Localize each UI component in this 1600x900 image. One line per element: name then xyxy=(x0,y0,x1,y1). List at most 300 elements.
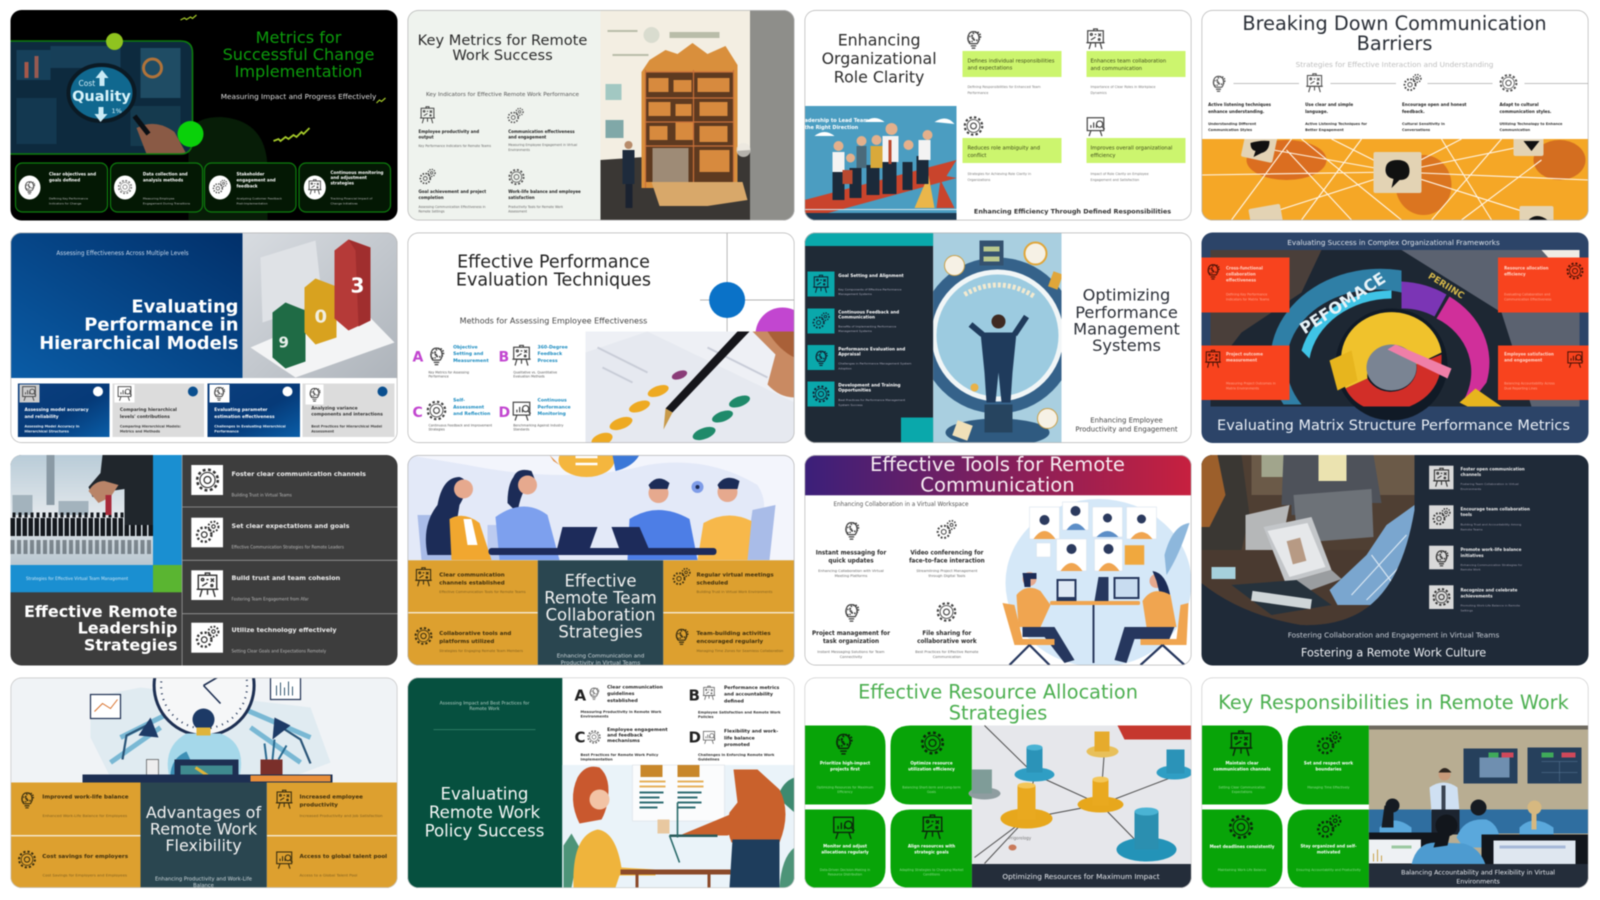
subtitle: Enhancing Collaboration in a Virtual Workspace xyxy=(833,502,969,508)
technique A: Objective xyxy=(453,344,478,350)
center panel xyxy=(140,782,267,888)
subtitle: Remote Work xyxy=(469,706,500,712)
item 1: and expectations xyxy=(968,66,1013,72)
grey strip xyxy=(750,10,794,220)
title: Evaluation Techniques xyxy=(456,270,651,290)
squiggle accents xyxy=(180,15,386,141)
panel background xyxy=(408,455,794,666)
panel: Breaking Down Communication Barriers xyxy=(1202,10,1588,231)
panel: Effective Remote Leadership Strategies xyxy=(10,455,398,666)
card border xyxy=(408,232,794,443)
technique C xyxy=(412,398,493,432)
block 1: Prioritize high-impact xyxy=(820,760,870,766)
item B: defined xyxy=(724,698,744,704)
metric 3: Goal achievement and project xyxy=(418,189,486,194)
title: Advantages of xyxy=(146,803,261,822)
item 1: channels xyxy=(1460,472,1482,477)
row 2: Set clear expectations and goals xyxy=(232,522,350,530)
advantage 1 xyxy=(22,793,129,818)
block 3 xyxy=(804,810,886,888)
tool 2: face-to-face interaction xyxy=(909,558,985,564)
title: Effective Performance xyxy=(457,252,650,272)
card 4: components and interactions xyxy=(311,412,383,418)
step card 1: Clear objectives and xyxy=(49,172,96,176)
item 1 xyxy=(1429,466,1525,491)
technique B: Feedback xyxy=(538,351,563,357)
title: Organizational xyxy=(822,49,937,68)
item 4: Opportunities xyxy=(838,388,871,392)
item A: guidelines xyxy=(607,691,635,697)
item D: Challenges in Enforcing Remote Work xyxy=(698,753,775,757)
item B: Policies xyxy=(698,715,714,719)
title: Remote Team xyxy=(544,588,657,608)
step 1 xyxy=(1208,76,1272,132)
block 1 xyxy=(1202,726,1282,804)
step 3: Encourage open and honest xyxy=(1402,102,1467,107)
item D xyxy=(688,728,778,762)
tool 1: quick updates xyxy=(828,558,874,564)
item 3: scheduled xyxy=(696,580,728,586)
item D: promoted xyxy=(724,742,750,748)
step card 4: and adjustment xyxy=(330,175,367,180)
item C: and feedback xyxy=(607,732,644,738)
title: Key Metrics for Remote xyxy=(418,32,587,49)
card 2: Comparing Hierarchical Models: xyxy=(120,424,181,428)
title: Work Success xyxy=(452,47,553,64)
step 3 xyxy=(1402,75,1467,132)
step 4: Adapt to cultural xyxy=(1500,102,1539,107)
title: Management xyxy=(1073,320,1180,338)
advantage 3 xyxy=(276,790,383,818)
tool 3: Project management for xyxy=(812,631,890,637)
technique A: Setting and xyxy=(453,351,483,357)
technique B: B xyxy=(498,350,509,366)
item 1: Defining Responsibilities for Enhanced Team xyxy=(968,85,1041,89)
item 4: System Success xyxy=(838,403,863,407)
block 3: Maintaining Work-Life Balance xyxy=(1218,868,1266,872)
item 4 xyxy=(1429,585,1520,612)
tool 4: Communication xyxy=(933,655,961,659)
item 3 xyxy=(1429,546,1523,572)
advantage 3: Increased Productivity and Job Satisfaction xyxy=(300,813,383,818)
item 3: Organizations xyxy=(968,178,991,182)
subtitle: Enhancing Communication and xyxy=(557,654,645,660)
panel background xyxy=(804,678,1192,888)
subtitle: Assessing Impact and Best Practices for xyxy=(440,700,530,706)
item 2: platforms utilized xyxy=(439,639,494,645)
tool 4 xyxy=(915,603,979,659)
panel background xyxy=(1202,455,1588,666)
box: bottom-left: measurement xyxy=(1226,358,1257,362)
technique A: Performance xyxy=(428,374,449,378)
block 2: Optimize resource xyxy=(910,760,953,766)
item 2 xyxy=(808,308,899,334)
tool 3 xyxy=(812,605,890,659)
technique B: Qualitative vs. Quantitative xyxy=(513,370,557,374)
image: man in dial xyxy=(920,232,1076,446)
metric 1: Key Performance Indicators for Remote Teams xyxy=(418,144,491,148)
step 2: Better Engagement xyxy=(1305,128,1344,132)
item 3: conflict xyxy=(968,153,986,159)
box: bottom-right: and engagement xyxy=(1504,358,1542,362)
panel: Evaluating Matrix Structure Performance Metrics xyxy=(1202,232,1588,443)
row 2 xyxy=(191,518,350,550)
title: Evaluating xyxy=(131,296,238,318)
step card 1 xyxy=(16,163,108,212)
advantage 4: Access to global talent pool xyxy=(300,854,387,860)
panel: Enhancing Organizational Role Clarity xyxy=(804,10,1192,220)
item 1: Key Components of Effective Performance xyxy=(838,288,902,292)
advantage 1: Enhanced Work-Life Balance for Employees xyxy=(42,813,127,818)
subtitle: Enhancing Productivity and Work-Life xyxy=(155,876,252,882)
step card 3: Stakeholder xyxy=(236,172,264,176)
box: bottom-right: Dual Reporting Lines xyxy=(1504,386,1538,390)
card border xyxy=(10,678,398,888)
item 4: Impact of Role Clarity on Employee xyxy=(1090,172,1149,176)
panel: Key Metrics for Remote Work Success xyxy=(408,10,794,220)
item 3: Regular virtual meetings xyxy=(696,572,774,578)
block 3: Monitor and adjust xyxy=(823,844,867,848)
card 3: estimation effectiveness xyxy=(214,414,275,420)
advantage 4 xyxy=(277,852,387,878)
item A: A xyxy=(574,686,586,704)
title: Effective Tools for Remote xyxy=(870,453,1125,476)
step card 1: goals defined xyxy=(49,178,80,182)
block 1 xyxy=(804,726,886,804)
subtitle: Measuring Impact and Progress Effectively xyxy=(221,92,377,101)
card 4: Assessment xyxy=(311,430,334,434)
title: Strategies xyxy=(558,622,643,642)
item 3 xyxy=(808,345,911,370)
step 1: Active listening techniques xyxy=(1208,102,1272,107)
panel: Optimizing Performance Management Systems xyxy=(804,232,1192,446)
card 2 xyxy=(112,384,204,437)
block 1: Setting Clear Communication xyxy=(1219,786,1265,790)
dark column xyxy=(804,232,933,443)
step 2: Use clear and simple xyxy=(1305,102,1353,107)
tool 3: Instant Messaging Solutions for Team xyxy=(817,650,885,654)
title: Strategies xyxy=(84,636,178,654)
illustration: video call xyxy=(1002,499,1192,667)
panel background xyxy=(408,232,794,443)
tool 2 xyxy=(909,521,985,578)
panel background xyxy=(1202,678,1588,888)
title: Evaluating xyxy=(441,784,528,804)
item C: mechanisms xyxy=(607,738,640,744)
footer bar xyxy=(1369,864,1588,888)
box: top-left: Defining Key Performance xyxy=(1226,292,1267,296)
panel: Effective Resource Allocation Strategies xyxy=(804,678,1192,888)
box: bottom-right xyxy=(1498,346,1588,400)
item 2: Encourage team collaboration xyxy=(1460,506,1530,512)
item 2: Importance of Clear Roles in Workplace xyxy=(1090,85,1155,89)
illustration: four colleagues xyxy=(408,443,794,560)
panel background xyxy=(408,11,600,220)
photo: magnifier over dashboard: 1% xyxy=(112,107,122,115)
block 4 xyxy=(1288,810,1369,888)
item 2 xyxy=(1429,505,1530,532)
item B xyxy=(688,685,781,719)
title: Remote Work xyxy=(429,803,541,822)
step card 3: Post-Implementation xyxy=(236,202,268,206)
photo: magnifier over dashboard: Quality xyxy=(72,89,131,105)
subtitle: Strategies for Effective Interaction and Understanding xyxy=(1296,60,1493,69)
box: top-right: Resource allocation xyxy=(1504,266,1549,270)
technique D: Performance xyxy=(538,404,571,410)
panel background xyxy=(408,678,794,888)
amber left column xyxy=(10,782,140,888)
block 4: Stay organized and self- xyxy=(1300,844,1357,848)
metric 1 xyxy=(418,107,491,148)
divider xyxy=(10,835,398,836)
advantage 4: Access to a Global Talent Pool xyxy=(300,872,357,878)
card 2: Comparing hierarchical xyxy=(120,407,177,413)
tool 1: Meeting Platforms xyxy=(835,574,867,578)
block 4: Conditions xyxy=(923,872,940,876)
item D: Guidelines xyxy=(698,758,719,762)
item 3: Promote work-life balance xyxy=(1460,547,1522,552)
item 2: and communication xyxy=(1090,66,1142,72)
rule xyxy=(434,728,536,731)
card 1: Assessing Model Accuracy in xyxy=(24,424,80,428)
title: Systems xyxy=(1092,336,1161,355)
item A: established xyxy=(607,698,638,704)
image: chess pawns city xyxy=(10,455,153,565)
item 1: Effective Communication Tools for Remote Teams xyxy=(439,590,526,594)
step 2: language. xyxy=(1305,109,1328,114)
band caption: Strategies for Effective Virtual Team Management xyxy=(26,576,128,581)
title: Enhancing xyxy=(838,30,921,50)
footer caption: Balancing Accountability and Flexibility in Virtual xyxy=(1401,870,1555,876)
technique B xyxy=(498,344,568,378)
item 4: Improves overall organizational xyxy=(1090,146,1172,152)
item 1: Foster open communication xyxy=(1460,466,1525,472)
row 1: Foster clear communication channels xyxy=(232,470,366,478)
step card 4: strategies xyxy=(330,180,355,186)
item 4: Settings xyxy=(1460,608,1473,612)
step card 2: Measuring Employee xyxy=(143,196,174,200)
subtitle: Productivity and Engagement xyxy=(1075,426,1178,434)
item 4: achievements xyxy=(1460,594,1493,598)
title: Optimizing xyxy=(1083,286,1170,304)
tool 1: Instant messaging for xyxy=(816,550,886,556)
step card 2: Engagement During Transitions xyxy=(143,202,191,206)
block 1: projects first xyxy=(830,766,860,772)
item 3 xyxy=(674,569,774,594)
item B: B xyxy=(688,686,700,704)
panel background xyxy=(1202,232,1588,443)
metric 3 xyxy=(418,169,486,214)
item 1: Management Systems xyxy=(838,292,872,296)
top caption: Evaluating Success in Complex Organizational Frameworks xyxy=(1287,238,1500,247)
item 4 xyxy=(1086,118,1186,182)
step 1: Understanding Different xyxy=(1208,122,1256,126)
step card 4: Continuous monitoring xyxy=(330,170,384,175)
step 4 xyxy=(1500,75,1563,132)
item 2: Management Systems xyxy=(838,329,872,333)
technique D xyxy=(498,398,571,432)
row 3 xyxy=(191,570,341,602)
step 3: feedback. xyxy=(1402,109,1425,114)
item B: Employee Satisfaction and Remote Work xyxy=(698,710,781,714)
item 4: Best Practices for Performance Management xyxy=(838,398,906,402)
item D: life balance xyxy=(724,736,755,742)
step 2 xyxy=(1305,74,1367,132)
panel: Key Responsibilities in Remote Work xyxy=(1202,678,1588,888)
panel background xyxy=(804,455,1192,666)
item 4: Recognize and celebrate xyxy=(1460,588,1518,592)
center panel xyxy=(538,560,663,666)
item 1 xyxy=(415,568,526,594)
title: Flexibility xyxy=(165,836,242,855)
box: top-left: collaboration xyxy=(1226,272,1256,276)
row 3: Build trust and team cohesion xyxy=(232,574,341,582)
title: Policy Success xyxy=(425,822,544,840)
item 2: Strategies for Engaging Remote Team Members xyxy=(439,649,523,653)
row 1: Building Trust in Virtual Teams xyxy=(232,492,292,498)
item 2: Benefits of Implementing Performance xyxy=(838,324,896,328)
technique B: Process xyxy=(538,358,558,364)
item B: and accountability xyxy=(724,692,773,698)
blue band xyxy=(10,565,153,592)
box: bottom-left: Project outcome xyxy=(1226,352,1263,356)
item D: D xyxy=(688,728,701,746)
illustration: worker at desk with clock xyxy=(82,636,332,782)
box: top-right: efficiency xyxy=(1504,272,1526,276)
lime circle xyxy=(106,33,123,50)
step connectors xyxy=(1234,82,1588,84)
decorative circles xyxy=(700,232,810,362)
row 1 xyxy=(191,465,366,498)
panel background xyxy=(10,10,398,220)
metric 3: completion xyxy=(418,195,444,200)
title: Metrics for xyxy=(256,28,342,47)
metric 2: Communication effectiveness xyxy=(508,129,575,134)
card 3: Evaluating parameter xyxy=(214,407,268,413)
technique C: Strategies xyxy=(428,428,445,432)
title: Breaking Down Communication xyxy=(1242,12,1547,35)
row 3: Fostering Team Engagement from Afar xyxy=(232,596,309,602)
card border xyxy=(10,232,398,443)
box: top-left: effectiveness xyxy=(1226,278,1257,282)
blue strip xyxy=(153,455,182,565)
title: Hierarchical Models xyxy=(39,333,238,354)
block 4: motivated xyxy=(1317,850,1340,854)
box: top-right: Communication Effectiveness xyxy=(1504,298,1552,302)
item A xyxy=(574,684,663,718)
card 4: Best Practices for Hierarchical Model xyxy=(311,424,382,428)
item 4 xyxy=(676,629,783,653)
tool 3: Connectivity xyxy=(840,655,863,659)
item 1 xyxy=(962,32,1062,95)
card border xyxy=(804,232,1192,443)
step 1: Communication Styles xyxy=(1208,128,1252,132)
box: top-right: Evaluating Collaboration and xyxy=(1504,292,1550,296)
item 2: tools xyxy=(1460,512,1472,517)
block 1: communication channels xyxy=(1213,766,1271,772)
divider xyxy=(408,612,794,613)
photo: magnifier over dashboard: Cost xyxy=(78,79,95,88)
advantage 2: Cost Savings for Employers and Employees xyxy=(42,872,127,878)
block 4: Adapting Strategies to Changing Market xyxy=(900,868,964,872)
step card 4 xyxy=(299,163,390,212)
block 2: Goals xyxy=(927,790,936,794)
panel: Metrics for Successful Change Implementation xyxy=(10,10,398,220)
image: 3D bars: 0 xyxy=(314,306,327,328)
footer caption: Optimizing Resources for Maximum Impact xyxy=(1002,872,1160,881)
tool 3: task organization xyxy=(823,639,879,645)
item C: C xyxy=(574,728,586,746)
metric 3: Assessing Communication Effectiveness in xyxy=(418,205,486,209)
subtitle: Assessing Effectiveness Across Multiple Levels xyxy=(56,251,189,257)
image: team on arrow: the Right Direction xyxy=(804,125,859,131)
item 2: Continuous Feedback and xyxy=(838,310,899,314)
item A: Measuring Productivity in Remote Work xyxy=(580,710,662,714)
item C: Implementation xyxy=(580,758,613,762)
card 1: and reliability xyxy=(24,414,59,420)
technique C: Self- xyxy=(453,398,465,404)
item 4: encouraged regularly xyxy=(696,639,764,645)
item 1: Defines individual responsibilities xyxy=(968,58,1055,64)
item 3: Challenges in Performance Management System xyxy=(838,362,911,366)
step 2: Active Listening Techniques for xyxy=(1305,122,1367,126)
block 3: allocations regularly xyxy=(821,850,869,854)
step 4: Communication xyxy=(1500,128,1531,132)
item 3: Building Trust in Virtual Work Environments xyxy=(696,590,773,594)
box: top-right xyxy=(1498,258,1588,312)
image: 3D bars xyxy=(242,232,398,378)
block 2: utilization efficiency xyxy=(908,766,955,772)
caption: Fostering Collaboration and Engagement in Virtual Teams xyxy=(1288,630,1499,640)
block 2 xyxy=(890,726,972,804)
image: performance gauge: PERIINC xyxy=(1426,272,1466,302)
item 1: Performance xyxy=(968,91,988,95)
step card 2 xyxy=(110,163,202,212)
technique B: 360-Degree xyxy=(538,344,568,350)
title: Fostering a Remote Work Culture xyxy=(1301,646,1486,660)
block 2: Set and respect work xyxy=(1304,760,1353,766)
block 4: Ensuring Accountability and Productivity xyxy=(1296,868,1361,872)
metric 1: Employee productivity and xyxy=(418,129,479,134)
step card 3: feedback xyxy=(236,184,258,188)
title: Role Clarity xyxy=(834,68,924,86)
item C: Best Practices for Remote Work Policy xyxy=(580,753,659,757)
image: team on arrow xyxy=(804,106,956,220)
title: Collaboration xyxy=(546,606,655,624)
item 3 xyxy=(962,117,1062,182)
panel: Effective Remote Team Collaboration Strategies xyxy=(408,443,794,666)
metric 2: Measuring Employee Engagement in Virtual xyxy=(508,143,577,147)
card 4 xyxy=(302,384,394,437)
step card 4: Tracking Financial Impact of xyxy=(330,196,373,200)
blue hero xyxy=(10,232,242,378)
image: team on arrow: adership to Lead Team xyxy=(804,118,868,124)
technique C: and Reflection xyxy=(453,411,490,417)
step card 2: analysis methods xyxy=(143,178,184,182)
panel background xyxy=(804,232,1192,443)
step card 3: Analyzing Customer Feedback xyxy=(236,196,282,200)
block 3 xyxy=(1202,810,1282,888)
step 4: communication styles. xyxy=(1500,109,1552,114)
header band xyxy=(804,455,1192,495)
item A: Clear communication xyxy=(607,684,663,690)
card 3 xyxy=(208,384,300,437)
panel: Effective Performance Evaluation Techniques xyxy=(408,232,810,449)
card 1: Hierarchical Structures xyxy=(24,430,69,434)
card border xyxy=(804,678,1192,888)
card 3: Performance xyxy=(214,430,239,434)
box: bottom-right: Employee satisfaction xyxy=(1504,352,1554,356)
